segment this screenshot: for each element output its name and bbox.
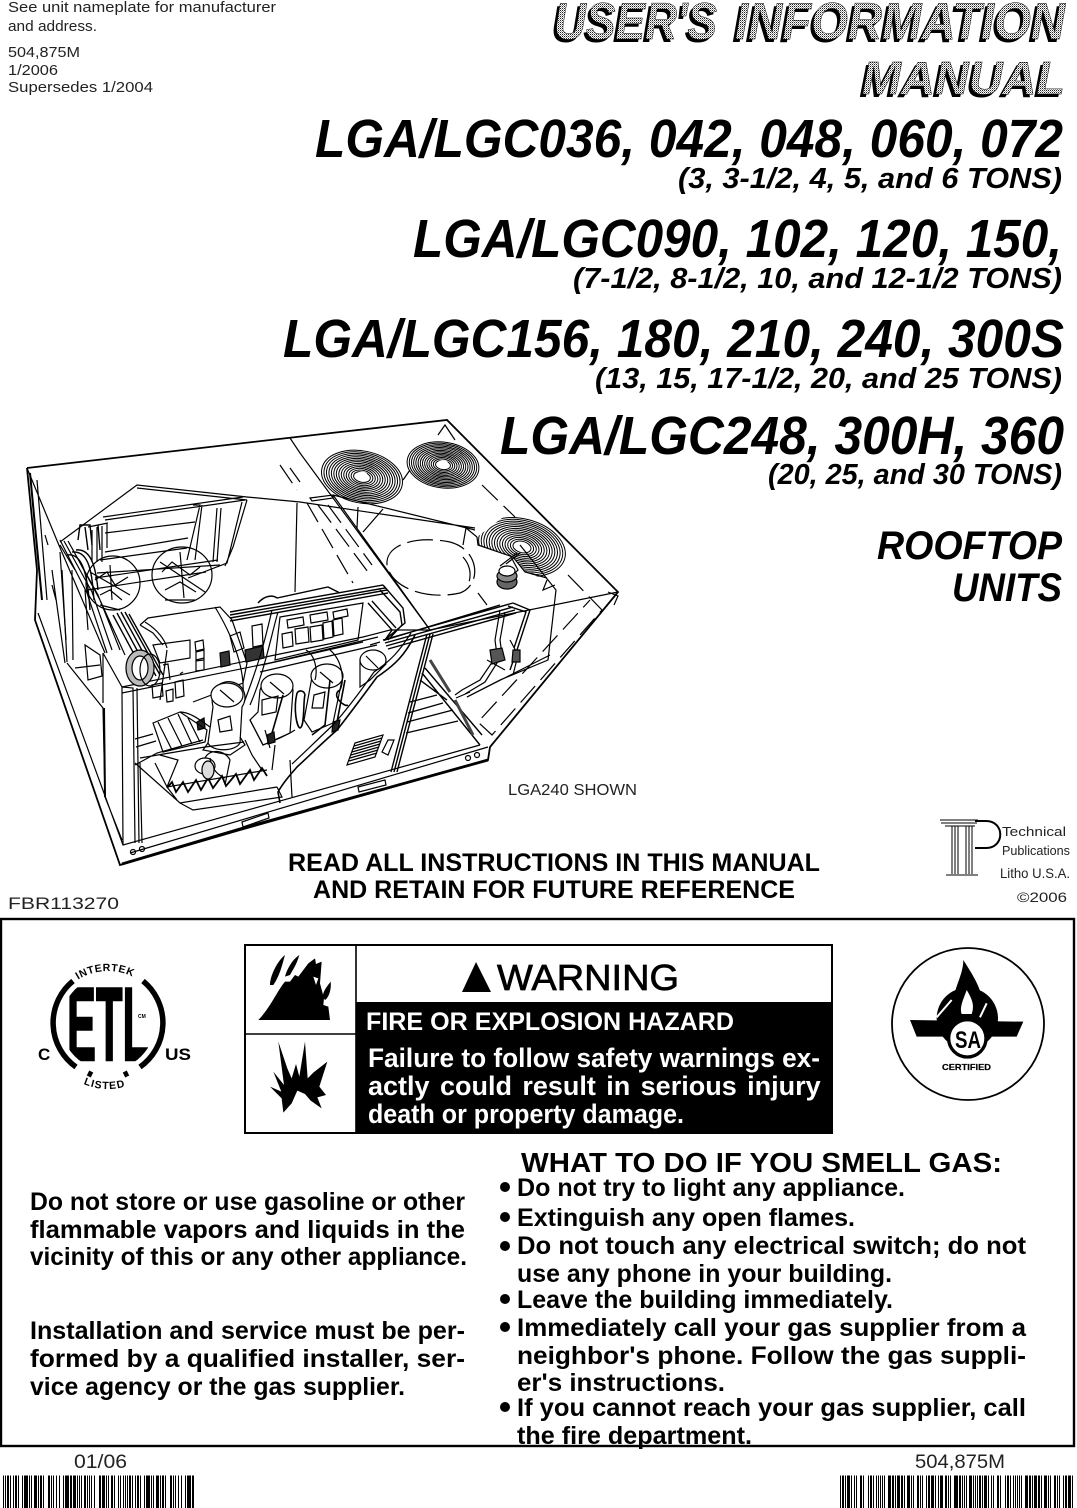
louvre vent bbox=[347, 735, 394, 765]
model list heading group 3 bbox=[283, 309, 1064, 395]
illustration: rooftop unit cutaway bbox=[27, 420, 618, 865]
technical publications logo: Publications bbox=[1002, 843, 1070, 858]
refrigerant piping bbox=[230, 585, 530, 670]
litho and copyright: ©2006 bbox=[1017, 889, 1067, 905]
dark relay blocks bbox=[220, 646, 264, 667]
casing outline bbox=[27, 420, 618, 865]
list: gas smell instructions: er's instructions. bbox=[517, 1369, 725, 1397]
list: gas smell instructions: Do not try to light any appliance. bbox=[517, 1174, 905, 1202]
blower motor bbox=[140, 607, 247, 735]
hazard text bbox=[368, 1043, 821, 1129]
text block: gasoline storage warning: Do not store or use gasoline or other bbox=[30, 1188, 465, 1216]
footer date: 01/06 bbox=[74, 1452, 127, 1473]
icon: warning triangle bbox=[462, 962, 491, 992]
text block: installation and service bbox=[30, 1317, 465, 1401]
text block: installation and service: formed by a qualified installer, ser- bbox=[30, 1345, 465, 1373]
list: gas smell instructions: Extinguish any open flames. bbox=[517, 1204, 855, 1232]
list: gas smell instructions bbox=[500, 1174, 1027, 1450]
heading: what to do if you smell gas: WHAT TO DO IF YOU SMELL GAS: bbox=[521, 1147, 1002, 1178]
model list heading group 4: (20, 25, and 30 TONS) bbox=[768, 459, 1062, 491]
nameplate note: See unit nameplate for manufacturer bbox=[8, 0, 276, 16]
fan motor bbox=[497, 553, 520, 589]
hazard text: Failure to follow safety warnings ex- bbox=[368, 1043, 820, 1073]
control panel bbox=[245, 603, 363, 705]
icon: ETL listed mark bbox=[38, 964, 191, 1090]
icon: ETL listed mark: INTERTEK bbox=[75, 964, 135, 980]
icon: CSA certified mark bbox=[892, 948, 1044, 1100]
title: user's information manual: MANUAL bbox=[859, 55, 1062, 107]
icon: ETL listed mark: LISTED bbox=[84, 1078, 124, 1090]
nameplate note bbox=[8, 0, 276, 96]
read all instructions notice: READ ALL INSTRUCTIONS IN THIS MANUAL bbox=[288, 849, 820, 877]
read all instructions notice bbox=[288, 849, 820, 904]
door frame bbox=[391, 634, 482, 772]
blower wheels bbox=[86, 556, 140, 610]
model list heading group 4 bbox=[500, 406, 1064, 491]
hazard heading: FIRE OR EXPLOSION HAZARD bbox=[366, 1008, 734, 1036]
hazard text: death or property damage. bbox=[368, 1099, 684, 1129]
icon: ETL listed mark: C bbox=[38, 1045, 50, 1064]
list: gas smell instructions: Leave the building immediately. bbox=[517, 1286, 893, 1314]
rooftop units heading: UNITS bbox=[952, 566, 1062, 610]
nameplate note: and address. bbox=[8, 19, 97, 35]
list: gas smell instructions: neighbor's phone. Follow the gas suppli- bbox=[517, 1342, 1026, 1370]
list: gas smell instructions: the fire department. bbox=[517, 1422, 752, 1450]
model list heading group 3: (13, 15, 17-1/2, 20, and 25 TONS) bbox=[595, 363, 1062, 395]
icon: CSA certified mark: CERTIFIED bbox=[942, 1062, 991, 1072]
barcode right bbox=[840, 1476, 1073, 1508]
heat exchanger tray bbox=[135, 712, 282, 810]
technical publications logo: Technical bbox=[1002, 824, 1066, 839]
text block: gasoline storage warning: flammable vapors and liquids in the bbox=[30, 1216, 465, 1244]
bottom edge bbox=[122, 760, 488, 864]
footer part number: 504,875M bbox=[915, 1452, 1005, 1473]
roof ridge and cut lines bbox=[60, 438, 556, 697]
text block: installation and service: Installation and service must be per- bbox=[30, 1317, 465, 1345]
litho and copyright: Litho U.S.A. bbox=[1000, 865, 1070, 881]
text block: gasoline storage warning bbox=[30, 1188, 467, 1271]
coil teeth bbox=[167, 768, 267, 792]
icon: CSA certified mark: SA bbox=[955, 1027, 981, 1054]
rooftop units heading: ROOFTOP bbox=[877, 524, 1062, 568]
right service pipes bbox=[455, 610, 550, 698]
title: user's information manual: MANUAL bbox=[862, 52, 1065, 104]
list: gas smell instructions: If you cannot reach your gas supplier, call bbox=[517, 1394, 1026, 1422]
tube bundle bbox=[67, 525, 100, 610]
icon: ETL listed mark: ETL bbox=[67, 967, 149, 1083]
evaporator coil bbox=[60, 497, 247, 655]
list: gas smell instructions: Immediately call your gas supplier from a bbox=[517, 1314, 1027, 1342]
icon: ETL listed mark: US bbox=[165, 1045, 191, 1064]
barcode left bbox=[3, 1476, 195, 1508]
warning heading: WARNING bbox=[497, 957, 679, 998]
fan belts bbox=[113, 612, 163, 686]
compressors bbox=[208, 650, 386, 750]
model list heading group 2: (7-1/2, 8-1/2, 10, and 12-1/2 TONS) bbox=[573, 263, 1062, 295]
model list heading group 1 bbox=[315, 109, 1063, 195]
nameplate note: 504,875M bbox=[8, 45, 80, 61]
hazard text: actly could result in serious injury bbox=[368, 1071, 821, 1101]
condenser fans bbox=[316, 443, 408, 511]
text block: installation and service: vice agency or the gas supplier. bbox=[30, 1373, 405, 1401]
list: gas smell instructions: Do not touch any electrical switch; do not bbox=[517, 1232, 1027, 1260]
icon: flame bbox=[258, 955, 331, 1020]
icon: ETL listed mark: CM bbox=[138, 1014, 146, 1020]
model list heading group 2 bbox=[413, 209, 1062, 295]
curved side panel cut bbox=[278, 635, 415, 803]
model list heading group 1: (3, 3-1/2, 4, 5, and 6 TONS) bbox=[678, 163, 1062, 195]
technical publications logo bbox=[940, 820, 1070, 875]
litho and copyright bbox=[1000, 865, 1070, 905]
icon: explosion bbox=[270, 1042, 327, 1113]
panel: warning box border bbox=[1, 919, 1074, 1446]
nameplate note: 1/2006 bbox=[8, 63, 58, 79]
nameplate note: Supersedes 1/2004 bbox=[8, 80, 153, 96]
caption: LGA240 shown: LGA240 SHOWN bbox=[508, 782, 637, 799]
dashed hatch opening bbox=[387, 540, 487, 605]
part code: FBR113270 bbox=[8, 894, 119, 913]
read all instructions notice: AND RETAIN FOR FUTURE REFERENCE bbox=[313, 876, 795, 904]
door handles and screws bbox=[242, 780, 386, 827]
list: gas smell instructions: use any phone in your building. bbox=[517, 1260, 892, 1288]
panel: warning label bbox=[245, 945, 833, 1134]
title: user's information manual bbox=[551, 0, 1066, 107]
text block: gasoline storage warning: vicinity of this or any other appliance. bbox=[30, 1243, 467, 1271]
rooftop units heading bbox=[877, 524, 1062, 610]
